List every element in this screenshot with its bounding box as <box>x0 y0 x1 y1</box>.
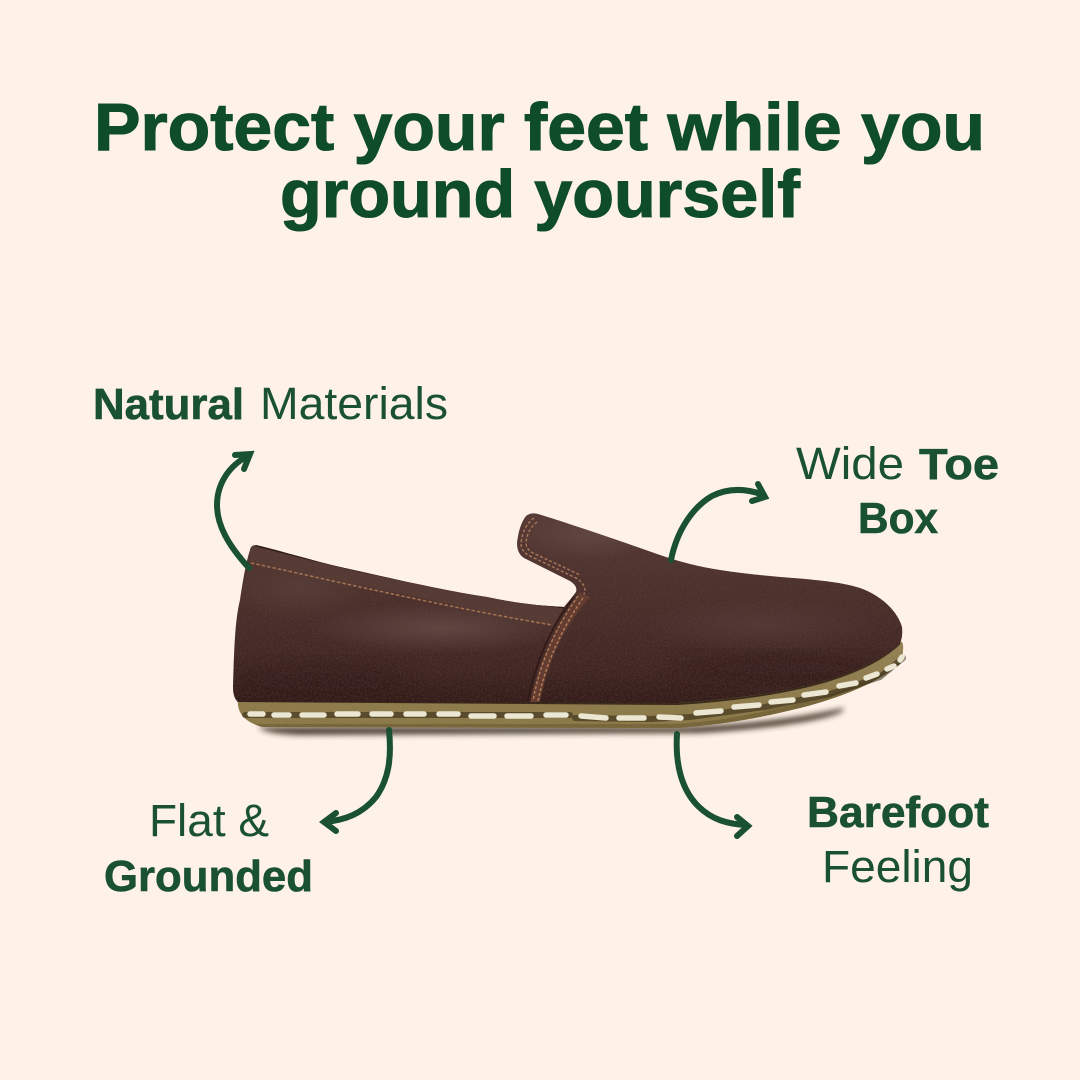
title <box>94 90 985 232</box>
title: ground yourself <box>280 157 801 232</box>
shoe sole <box>238 641 903 728</box>
arrow: barefoot feeling <box>677 734 748 836</box>
label: wide toe box: Wide <box>796 438 904 489</box>
label: natural materials <box>93 378 448 429</box>
label: barefoot feeling: Barefoot <box>807 789 989 837</box>
leather grain <box>233 514 902 703</box>
label: barefoot feeling <box>807 789 989 892</box>
arrow: wide toe box <box>671 484 765 560</box>
label: natural materials: Natural <box>93 381 244 429</box>
label: natural materials: Materials <box>260 378 448 429</box>
stitches <box>245 658 903 719</box>
arrow: flat and grounded <box>324 730 390 831</box>
arrow: natural materials <box>217 454 250 568</box>
shoe product image <box>225 505 915 735</box>
title: Protect your feet while you <box>94 90 985 165</box>
label: barefoot feeling: Feeling <box>822 841 973 892</box>
label: flat and grounded: Grounded <box>104 853 313 901</box>
label: wide toe box: Toe <box>919 441 999 489</box>
shoe ground shadow <box>258 708 844 735</box>
label: wide toe box <box>796 438 999 543</box>
shoe leather upper <box>233 513 902 703</box>
collar stitch <box>251 563 552 625</box>
vamp stitching <box>521 518 585 594</box>
label: wide toe box: Box <box>858 495 938 543</box>
collar band <box>250 545 564 626</box>
leather highlights <box>348 610 532 646</box>
label: flat and grounded: Flat & <box>149 795 269 846</box>
label: flat and grounded <box>104 795 313 901</box>
side seam <box>530 592 590 702</box>
